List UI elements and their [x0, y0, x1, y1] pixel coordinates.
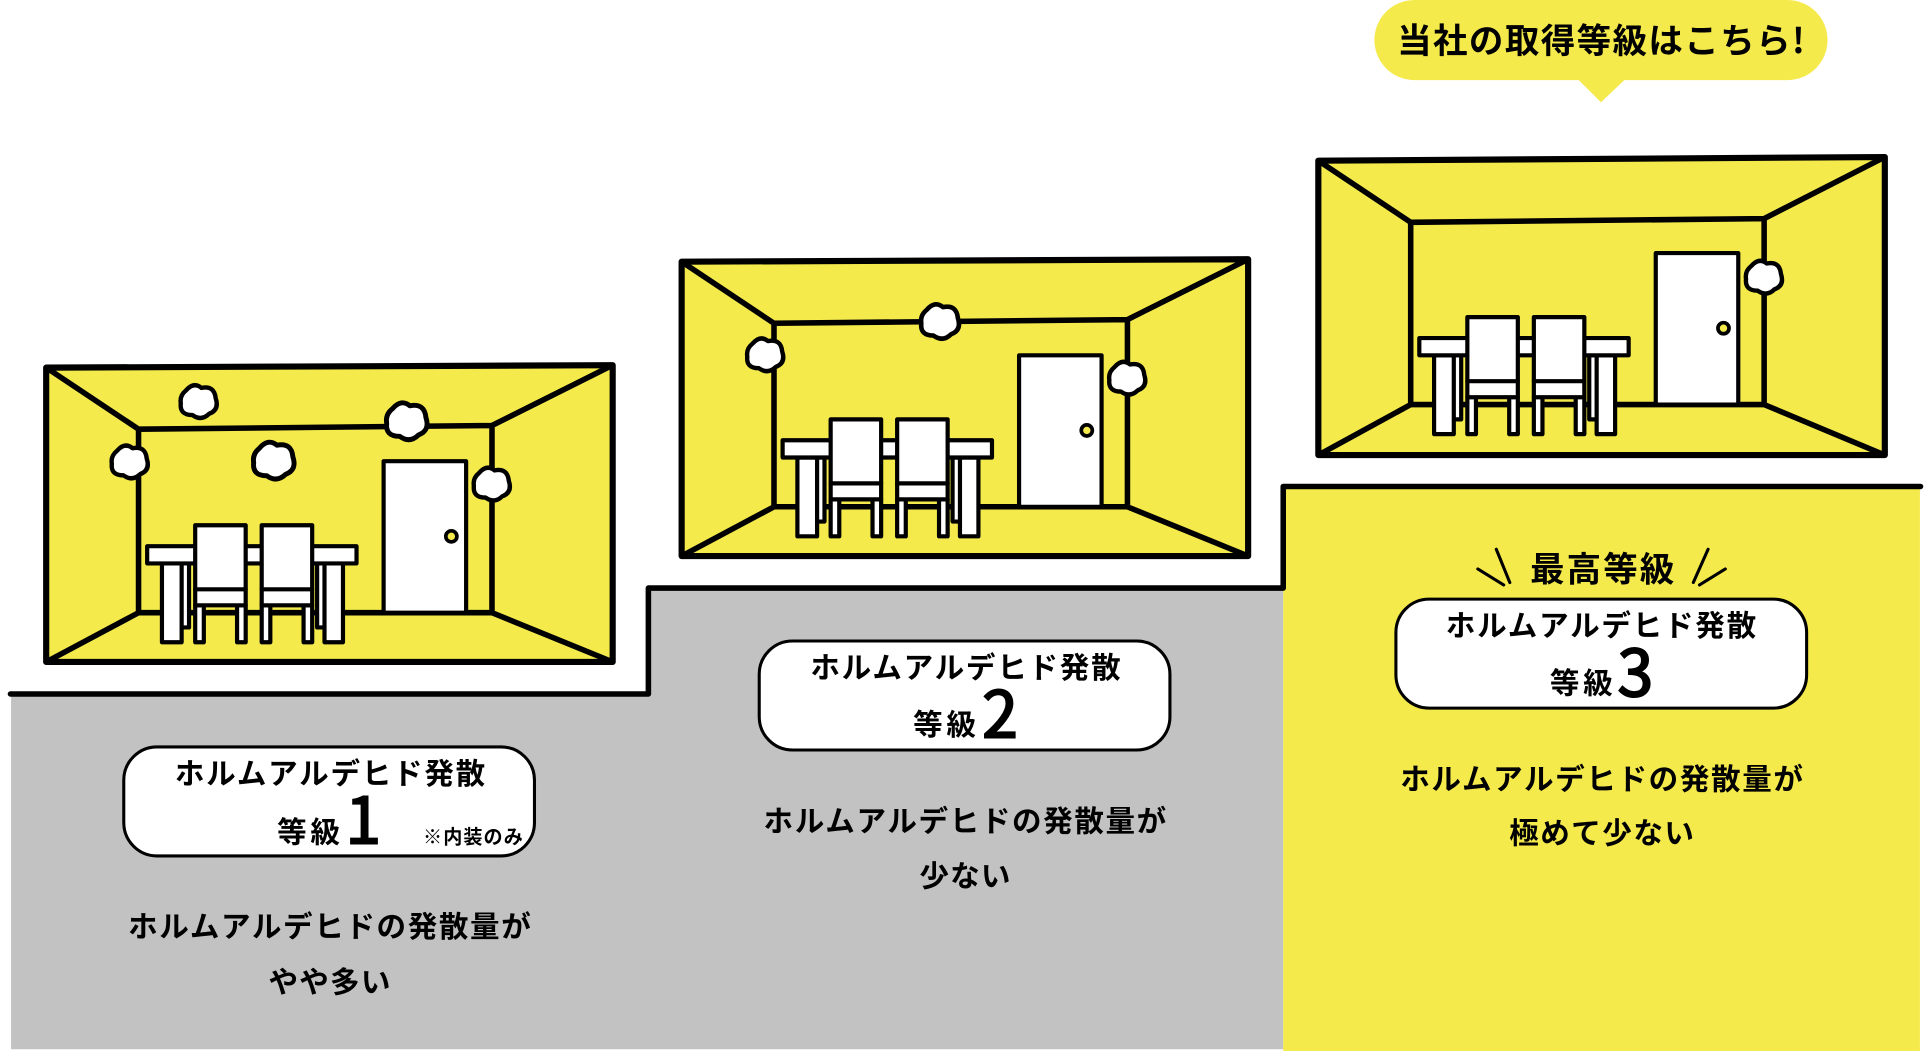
callout: our certified grade [1374, 0, 1828, 102]
grade 1 badge: ホルムアルデヒド発散 [175, 750, 485, 793]
grade 2 badge [759, 641, 1170, 757]
door [384, 461, 466, 613]
step panel: grey steps for grades 1 and 2 [11, 587, 1283, 1049]
grade 1 badge: 等級 [277, 808, 340, 851]
table and chairs [1419, 317, 1629, 434]
grade 3 description: ホルムアルデヒドの発散量が [1400, 755, 1803, 798]
staircase outline [10, 486, 1921, 694]
grade 2 badge: 等級 [913, 701, 976, 744]
grade 3 badge: 等級 [1550, 659, 1613, 702]
grade 3 badge: ホルムアルデヒド発散 [1446, 602, 1756, 645]
grade 1 description [128, 903, 531, 1002]
grade 2 description: 少ない [919, 853, 1010, 896]
grade 1 badge: ※内装のみ [423, 823, 523, 850]
grade 3 badge: 3 [1618, 623, 1653, 715]
grade 3 description: 極めて少ない [1509, 810, 1694, 853]
table and chairs [147, 525, 357, 642]
door [1656, 253, 1738, 405]
callout: our certified grade: 当社の取得等級はこちら! [1397, 13, 1805, 63]
grade 2 description: ホルムアルデヒドの発散量が [764, 797, 1166, 840]
pollutant clouds [112, 385, 510, 500]
grade 1 description: やや多い [268, 959, 390, 1002]
step panel: yellow step for grade 3 [1283, 486, 1920, 1051]
grade 3 description [1400, 755, 1803, 853]
grade 2 badge: ホルムアルデヒド発散 [810, 644, 1121, 687]
pollutant clouds [747, 304, 1145, 395]
room illustration: grade 2 [682, 259, 1248, 556]
room illustration: grade 3 [1318, 157, 1885, 455]
table and chairs [783, 419, 992, 536]
room illustration: grade 1 [46, 365, 613, 662]
door [1019, 355, 1102, 507]
pollutant cloud [1746, 261, 1782, 294]
grade 1 badge [124, 747, 534, 863]
grade 1 description: ホルムアルデヒドの発散量が [128, 903, 531, 946]
grade 2 description [764, 797, 1166, 896]
grade 3 badge [1396, 599, 1807, 715]
highest grade label with rays [1478, 541, 1725, 591]
highest grade label with rays: 最高等級 [1530, 541, 1674, 591]
grade 2 badge: 2 [982, 665, 1018, 757]
grade 1 badge: 1 [346, 771, 381, 863]
